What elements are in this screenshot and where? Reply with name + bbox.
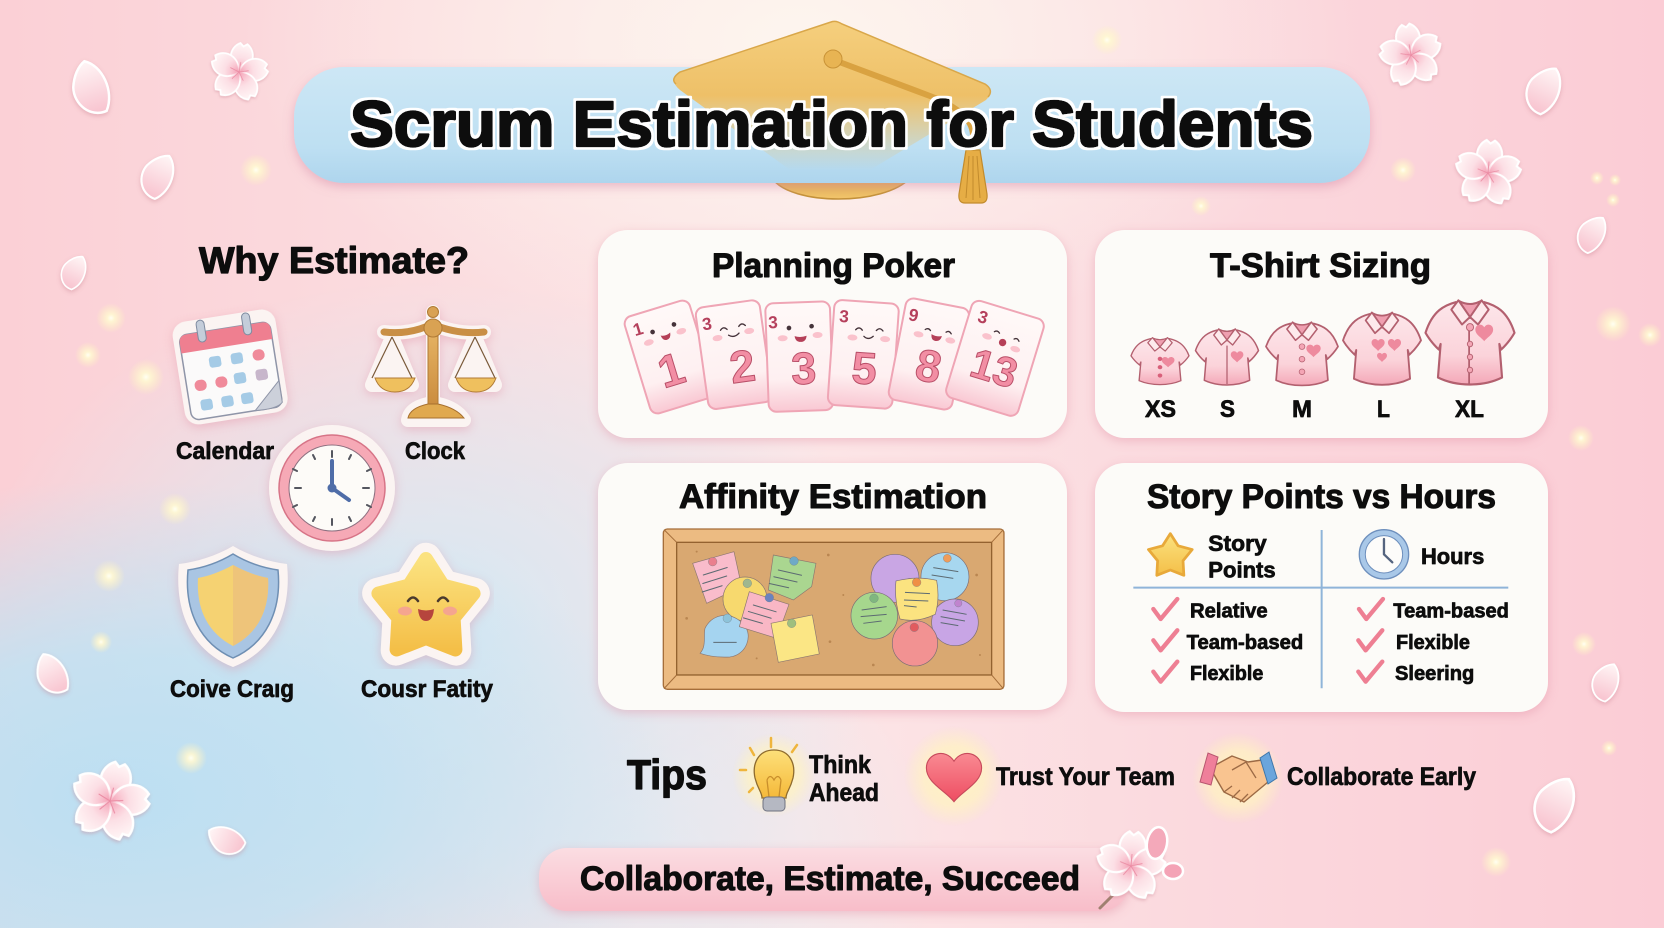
right checklist: Flexible xyxy=(1396,631,1470,654)
heading: t-shirt sizing: T-Shirt Sizing xyxy=(1210,247,1431,285)
left checklist xyxy=(1153,599,1303,685)
card 1: 1 xyxy=(630,318,646,340)
heading: affinity estimation: Affinity Estimation xyxy=(679,478,987,516)
left checklist: Relative xyxy=(1190,600,1268,623)
right checklist: Team-based xyxy=(1393,600,1509,623)
label: calendar: Calendar xyxy=(176,438,274,465)
heading: planning poker: Planning Poker xyxy=(712,247,955,285)
decorative cherry blossoms xyxy=(59,18,1526,851)
card 2: 2 xyxy=(726,339,758,393)
tassel cord xyxy=(824,50,987,203)
panel: affinity estimation xyxy=(598,463,1067,710)
icon: light bulb xyxy=(732,733,816,817)
icon: heart xyxy=(904,726,1004,826)
left checklist: Team-based xyxy=(1187,631,1303,654)
text: collaborate early: Collaborate Early xyxy=(1287,763,1476,791)
size labels: XL xyxy=(1455,396,1484,423)
card 6: 3 xyxy=(975,306,991,328)
icon: handshake xyxy=(1192,732,1284,824)
panel: planning poker xyxy=(598,230,1067,438)
shirt XL xyxy=(1426,300,1514,385)
hours label: Hours xyxy=(1421,544,1484,569)
icon: blue clock xyxy=(1359,530,1409,579)
icon: calendar xyxy=(171,307,290,426)
card 4 xyxy=(827,300,899,409)
icon: star face xyxy=(377,558,475,650)
tips row xyxy=(627,726,1476,826)
panel: t-shirt sizing xyxy=(1095,230,1548,438)
card 4: 5 xyxy=(850,342,879,395)
sticky notes left group xyxy=(693,552,819,662)
text: think ahead: Think xyxy=(809,751,871,779)
text: trust your team: Trust Your Team xyxy=(996,763,1175,791)
story points label: Points xyxy=(1208,558,1276,583)
sticky notes right group xyxy=(851,553,978,666)
panel: story points vs hours xyxy=(1095,463,1548,712)
label: clock: Clock xyxy=(405,438,466,465)
panel: why estimate xyxy=(170,240,496,703)
title: Scrum Estimation for Students xyxy=(350,88,1313,160)
heading: tips: Tips xyxy=(627,751,707,798)
card 5: 9 xyxy=(907,304,920,326)
card 3: 3 xyxy=(768,312,778,332)
card 3 xyxy=(765,301,834,412)
shirt XS xyxy=(1131,338,1189,385)
heading: story points vs hours: Story Points vs Hours xyxy=(1147,478,1496,516)
size labels: L xyxy=(1377,396,1390,423)
graduation cap skull xyxy=(772,170,910,199)
card 6 xyxy=(944,299,1046,418)
title banner xyxy=(294,67,1370,183)
story points label: Story xyxy=(1208,531,1267,556)
graduation cap xyxy=(674,21,991,203)
icon: star xyxy=(1148,534,1192,575)
card 4: 3 xyxy=(839,306,850,327)
shirt M xyxy=(1266,322,1338,385)
bottom banner xyxy=(539,826,1183,911)
shirt L xyxy=(1343,312,1421,385)
card 1 xyxy=(623,299,717,415)
left checklist: Flexible xyxy=(1190,662,1263,685)
text: think ahead xyxy=(809,751,879,807)
heading: why estimate: Why Estimate? xyxy=(199,240,469,281)
right checklist: Sleering xyxy=(1395,662,1474,685)
card 2: 3 xyxy=(701,313,713,334)
size labels: XS xyxy=(1145,396,1176,423)
card 2 xyxy=(695,299,773,410)
icon: shield xyxy=(178,546,288,667)
label: shield: Coive Craıg xyxy=(170,676,294,703)
size labels: S xyxy=(1220,396,1235,423)
poker cards xyxy=(623,297,1046,418)
comparison table xyxy=(1133,530,1509,688)
card 1: 1 xyxy=(652,342,691,398)
right checklist xyxy=(1358,599,1509,685)
text: think ahead: Ahead xyxy=(809,779,879,807)
icon: scale xyxy=(372,306,496,420)
icon: cherry blossom branch xyxy=(1091,826,1183,908)
card 6: 13 xyxy=(965,339,1023,397)
story points label xyxy=(1208,531,1276,583)
card 5: 8 xyxy=(912,339,946,393)
size labels xyxy=(1145,396,1484,423)
cork board xyxy=(663,529,1004,689)
icon: clock xyxy=(269,425,395,551)
card 5 xyxy=(887,297,971,411)
card 3: 3 xyxy=(790,342,817,394)
size labels: M xyxy=(1292,396,1312,423)
label: star: Cousr Fatity xyxy=(361,676,494,703)
banner text: Collaborate, Estimate, Succeed xyxy=(580,860,1080,898)
shirt S xyxy=(1196,329,1258,385)
